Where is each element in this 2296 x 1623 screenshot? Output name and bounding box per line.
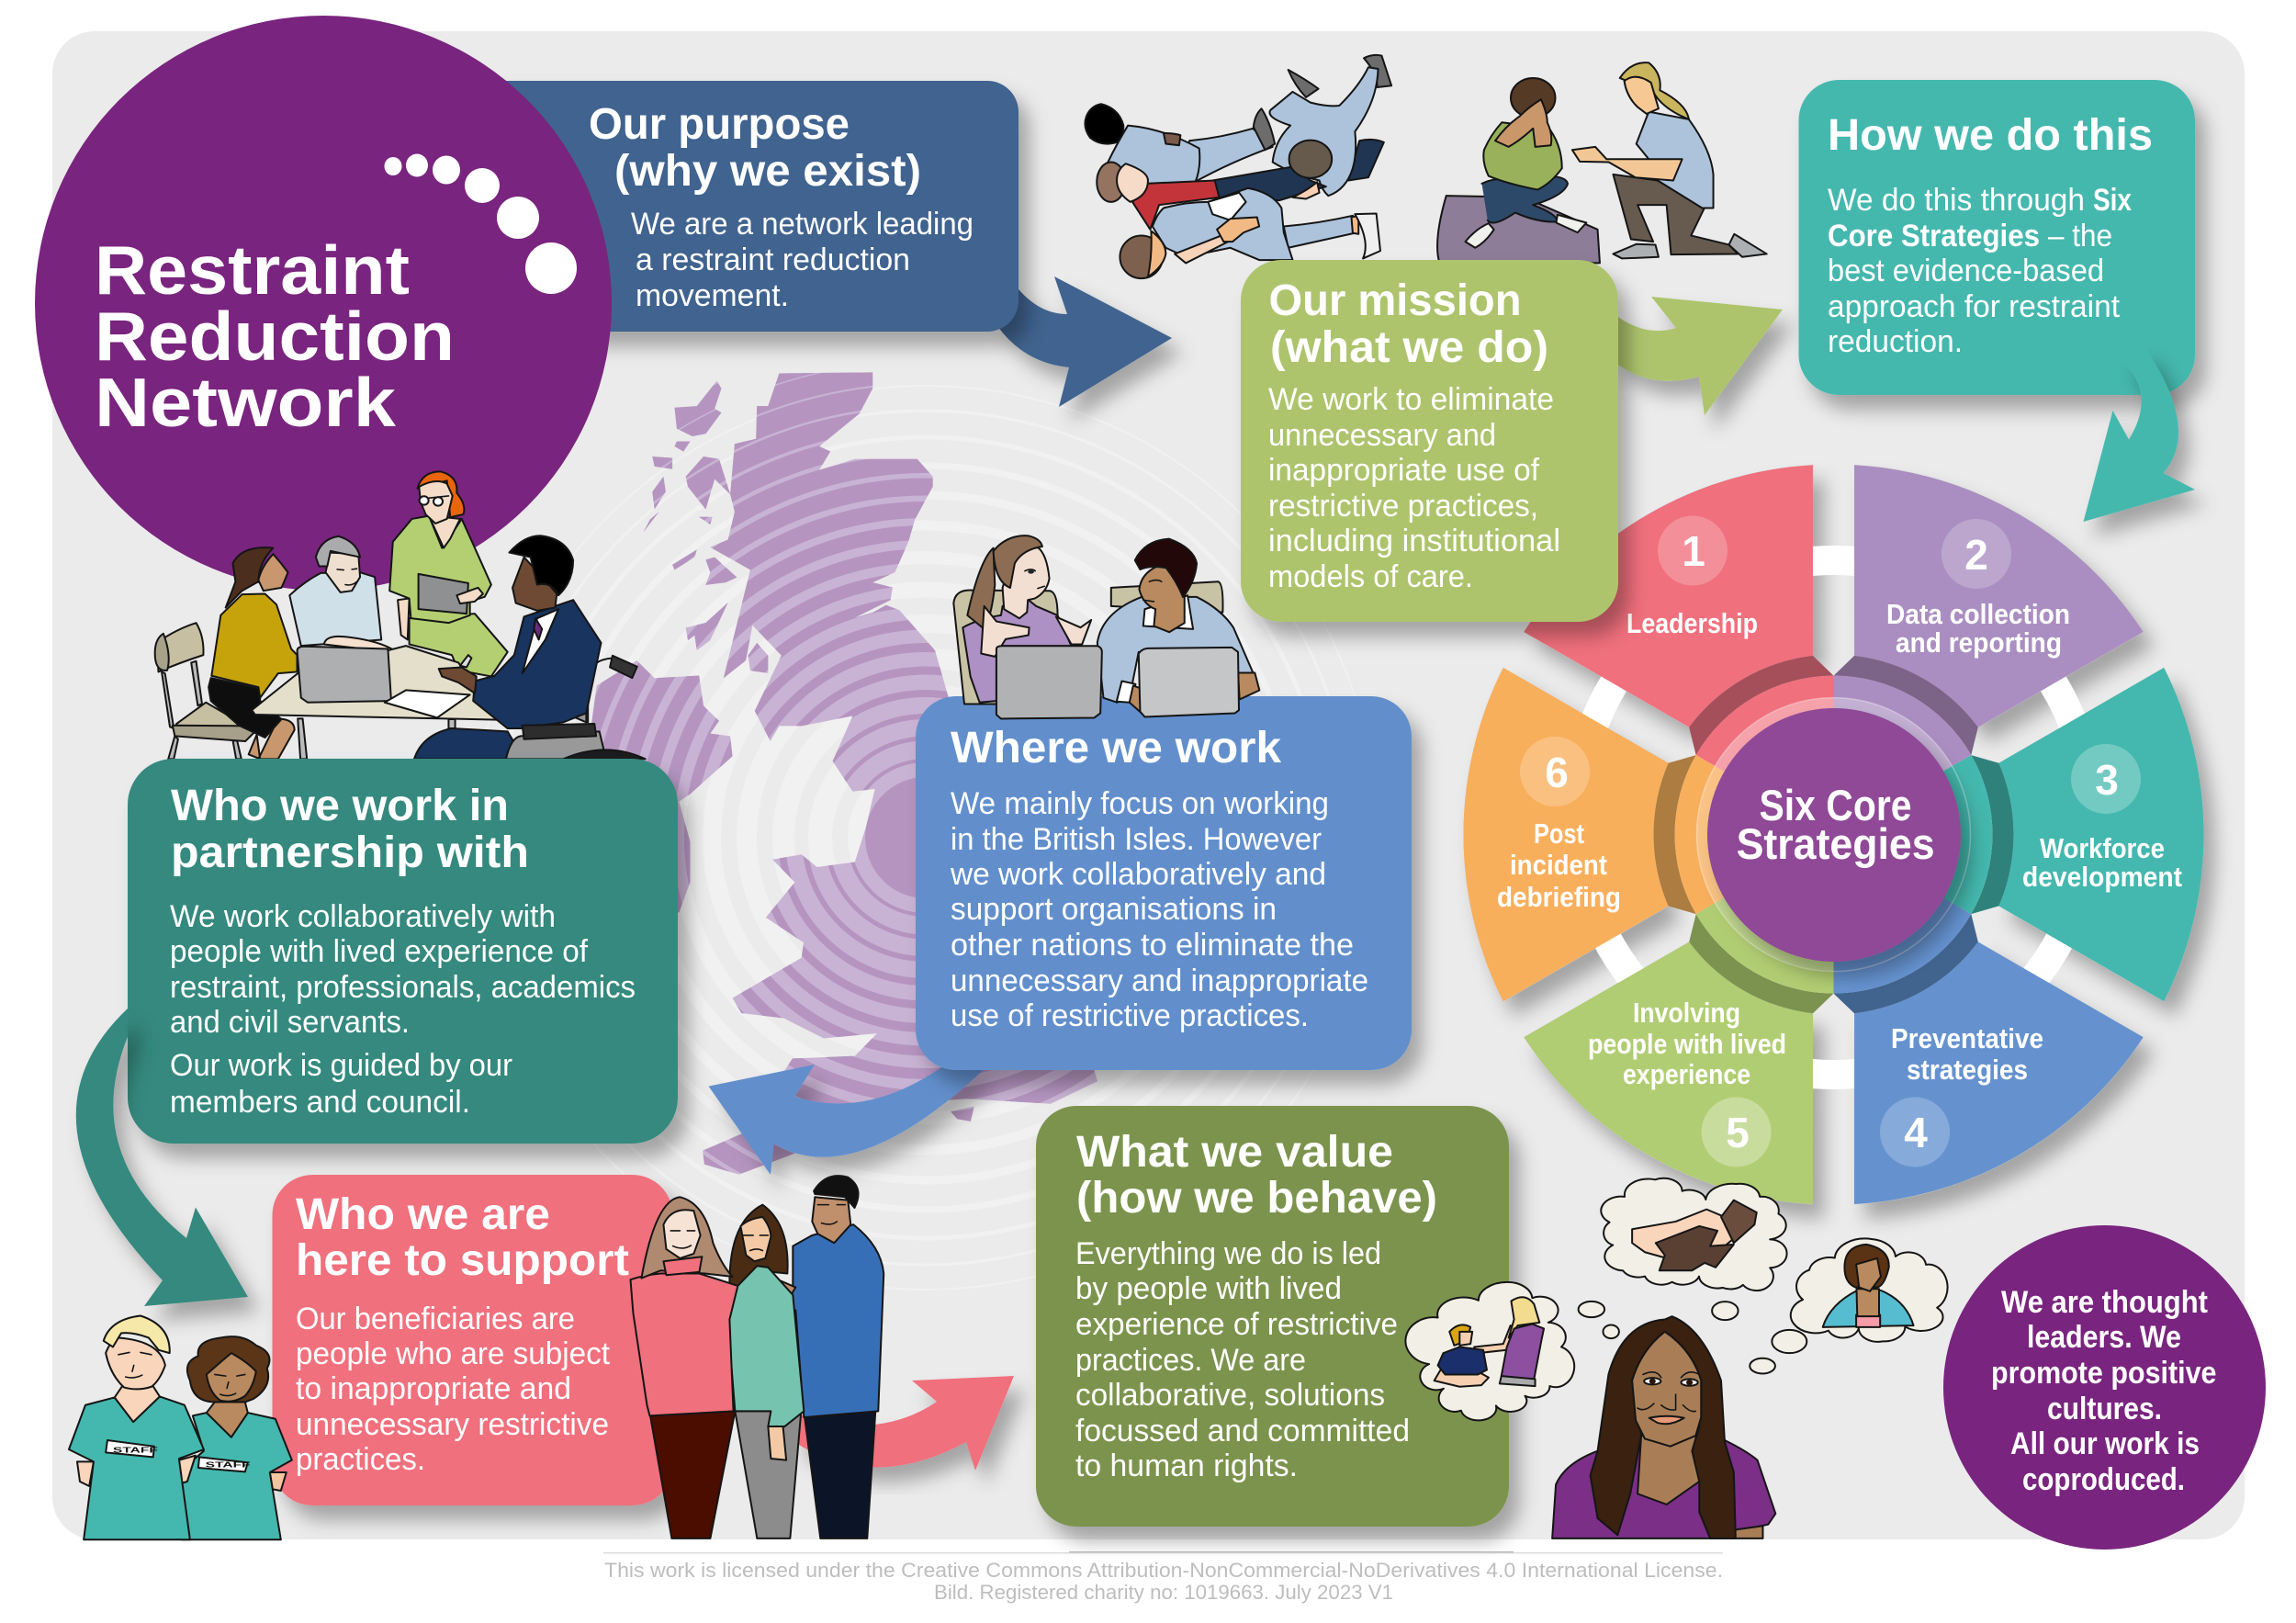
number badges: 5	[1726, 1109, 1750, 1156]
text: value body: collaborative, solutions	[1075, 1378, 1385, 1413]
segment labels: Workforce	[2040, 832, 2165, 864]
number badges: 1	[1682, 527, 1705, 575]
text: support body: Our beneficiaries are	[296, 1302, 575, 1336]
thought bubble: portrait	[1791, 1238, 1948, 1342]
logo wordmark	[95, 231, 455, 441]
number badges: 4	[1904, 1109, 1928, 1156]
text: value body: practices. We are	[1075, 1343, 1306, 1378]
heading: who we are: Who we are	[296, 1190, 550, 1239]
segment labels: debriefing	[1497, 881, 1621, 913]
text: partnership body: and civil servants.	[170, 1005, 410, 1040]
wheel: six core strategies	[1464, 431, 2203, 1238]
arrow: where we work to who we are	[709, 1065, 988, 1175]
wheel centre: Six Core	[1760, 781, 1912, 829]
heading: partnership: Who we work in	[171, 782, 509, 830]
arrow: mission to how	[1612, 297, 1783, 415]
segment labels: incident	[1510, 849, 1607, 881]
heading: what we value: What we value	[1076, 1128, 1393, 1177]
text: where body: We mainly focus on working	[951, 786, 1329, 821]
heading: what we value	[1076, 1128, 1437, 1223]
text: mission body: We work to eliminate	[1268, 382, 1554, 417]
segment 4: preventative	[1743, 845, 2163, 1238]
footer: licence: This work is licensed under the Creative Commons Attribution-NonCommercial-NoDerivatives 4.0 International License.	[604, 1559, 1723, 1582]
text: support body	[296, 1302, 611, 1477]
text: value body: by people with lived	[1075, 1271, 1342, 1306]
text: mission body: restrictive practices,	[1268, 489, 1538, 524]
panel: what we value	[1036, 1106, 1509, 1527]
heading: our purpose: Our purpose	[589, 100, 850, 149]
thought bubble dots	[1579, 1302, 1806, 1373]
text: where body: support organisations in	[951, 892, 1277, 927]
text: where body: unnecessary and inappropriate	[951, 964, 1368, 998]
heading: where we work: Where we work	[951, 724, 1281, 772]
panel: who we work in partnership with	[128, 759, 678, 1144]
footer: licence: Bild. Registered charity no: 1019663. July 2023 V1	[934, 1581, 1393, 1604]
panel: how we do this	[1798, 80, 2195, 395]
callout: thought leaders circle	[1943, 1225, 2266, 1550]
heading: what we value: (how we behave)	[1076, 1174, 1437, 1223]
callout: thought leaders circle: leaders. We	[2027, 1320, 2181, 1355]
text: how body: – the	[2048, 219, 2112, 254]
heading: our mission: (what we do)	[1270, 323, 1548, 372]
text: purpose body: We are a network leading	[631, 207, 974, 242]
heading: our mission: Our mission	[1269, 276, 1521, 325]
text: where body: use of restrictive practices.	[951, 998, 1309, 1033]
segment 5: involving people	[1504, 845, 1924, 1238]
segment labels: people with lived	[1588, 1028, 1786, 1060]
heading: who we are	[296, 1190, 629, 1285]
segment 2: data collection	[1743, 431, 2163, 824]
callout: thought leaders circle: All our work is	[2010, 1426, 2200, 1461]
segment labels: development	[2022, 861, 2182, 893]
text: support body: people who are subject	[296, 1336, 611, 1371]
callout: thought leaders circle: promote positive	[1991, 1356, 2217, 1391]
arrow: how to wheel	[2083, 345, 2195, 522]
illustration: team meeting	[155, 471, 646, 759]
text: how body: We do this through	[1828, 183, 2085, 218]
illustration: staff nurses: STAFF	[113, 1446, 158, 1454]
text: partnership body: members and council.	[170, 1085, 470, 1120]
segment labels: strategies	[1907, 1054, 2028, 1086]
number badges: 3	[2095, 756, 2119, 804]
text: mission body: models of care.	[1268, 559, 1473, 594]
text: how body: approach for restraint	[1828, 289, 2121, 324]
text: purpose body: a restraint reduction	[636, 242, 910, 277]
thought bubble: hands	[1601, 1178, 1787, 1291]
text: support body: practices.	[296, 1442, 425, 1477]
logo wordmark: Reduction	[95, 298, 455, 375]
text: partnership body: Our work is guided by our	[170, 1048, 512, 1083]
panel: our mission	[1241, 260, 1618, 622]
text: where body: other nations to eliminate the	[951, 928, 1354, 963]
text: mission body: unnecessary and	[1268, 418, 1496, 453]
text: value body: focussed and committed	[1075, 1414, 1410, 1448]
wheel shadow layer	[1464, 431, 2203, 1238]
heading: partnership	[171, 782, 529, 877]
text: partnership body	[170, 899, 636, 1120]
segment 6: post incident	[1464, 668, 1725, 1001]
number badges	[1520, 516, 2141, 1167]
segment labels: Post	[1534, 817, 1584, 850]
text: how body: Six	[2093, 183, 2132, 218]
logo wordmark: Restraint	[95, 231, 410, 309]
heading: how we do this: How we do this	[1828, 111, 2153, 160]
callout: thought leaders circle: cultures.	[2047, 1392, 2162, 1426]
text: partnership body: people with lived experience of	[170, 934, 589, 969]
illustration: staff nurses: STAFF	[206, 1460, 251, 1469]
text: purpose body	[631, 207, 974, 313]
panel: where we work	[916, 696, 1412, 1070]
text: how body: best evidence-based	[1828, 254, 2104, 288]
thought bubble: support conversation	[1405, 1282, 1574, 1420]
panel: our purpose	[459, 81, 1019, 332]
heading: partnership: partnership with	[171, 828, 529, 877]
illustration: family group	[630, 1176, 884, 1538]
segment labels	[1497, 598, 2182, 1090]
number badges: 6	[1545, 749, 1569, 796]
arrow: purpose to mission	[997, 276, 1172, 407]
text: mission body: inappropriate use of	[1268, 453, 1540, 488]
segment 3: workforce	[1942, 668, 2203, 1001]
segment 1: leadership	[1504, 431, 1924, 824]
text: value body	[1075, 1236, 1410, 1483]
text: how body: Core Strategies	[1828, 219, 2040, 254]
text: purpose body: movement.	[636, 278, 789, 313]
text: where body: we work collaboratively and	[950, 857, 1326, 892]
wheel centre: Strategies	[1737, 819, 1935, 868]
logo dots	[384, 154, 577, 294]
wheel backing ring	[1576, 560, 2090, 1075]
background concentric rings	[474, 386, 1378, 1290]
text: value body: to human rights.	[1075, 1448, 1298, 1483]
segment labels: experience	[1623, 1058, 1750, 1090]
text: partnership body: We work collaboratively with	[170, 899, 556, 934]
heading: who we are: here to support	[296, 1236, 629, 1285]
heading: our purpose	[589, 100, 921, 196]
illustration: staff nurses	[69, 1316, 292, 1539]
illustration: woman with thought bubbles	[1405, 1178, 1948, 1538]
segment labels: Data collection	[1886, 598, 2070, 630]
callout: thought leaders circle: We are thought	[2001, 1285, 2208, 1320]
text: value body: experience of restrictive	[1075, 1307, 1398, 1342]
arrow: partnership to who we support	[76, 1009, 248, 1306]
segment labels: Preventative	[1891, 1022, 2043, 1054]
text: partnership body: restraint, professionals, academics	[170, 970, 636, 1005]
segment labels: Leadership	[1626, 607, 1758, 639]
segment labels: and reporting	[1896, 626, 2062, 659]
text: mission body	[1268, 382, 1560, 594]
logo wordmark: Network	[95, 364, 396, 441]
text: mission body: including institutional	[1268, 524, 1560, 558]
illustration: two colleagues with laptops	[953, 535, 1259, 718]
callout: thought leaders circle: coproduced.	[2022, 1462, 2185, 1497]
panel: who we are here to support	[272, 1175, 672, 1505]
heading: our mission	[1269, 276, 1548, 372]
text: support body: to inappropriate and	[296, 1371, 571, 1406]
map: British Isles with concentric rings	[591, 372, 1097, 1175]
number badges: 2	[1964, 531, 1988, 579]
illustration: restraint group	[1085, 55, 1767, 278]
text: where body	[950, 786, 1368, 1033]
arrow: who we support to values	[794, 1376, 1014, 1471]
text: support body: unnecessary restrictive	[296, 1407, 609, 1442]
text: how body	[1828, 183, 2132, 359]
logo circle: Restraint Reduction Network	[35, 16, 612, 591]
text: where body: in the British Isles. However	[951, 822, 1322, 857]
segment labels: Involving	[1633, 997, 1740, 1029]
text: value body: Everything we do is led	[1075, 1236, 1381, 1271]
footer: licence	[603, 1551, 1723, 1604]
text: how body: reduction.	[1828, 324, 1963, 359]
heading: our purpose: (why we exist)	[614, 147, 921, 196]
wheel centre	[1697, 698, 1971, 972]
